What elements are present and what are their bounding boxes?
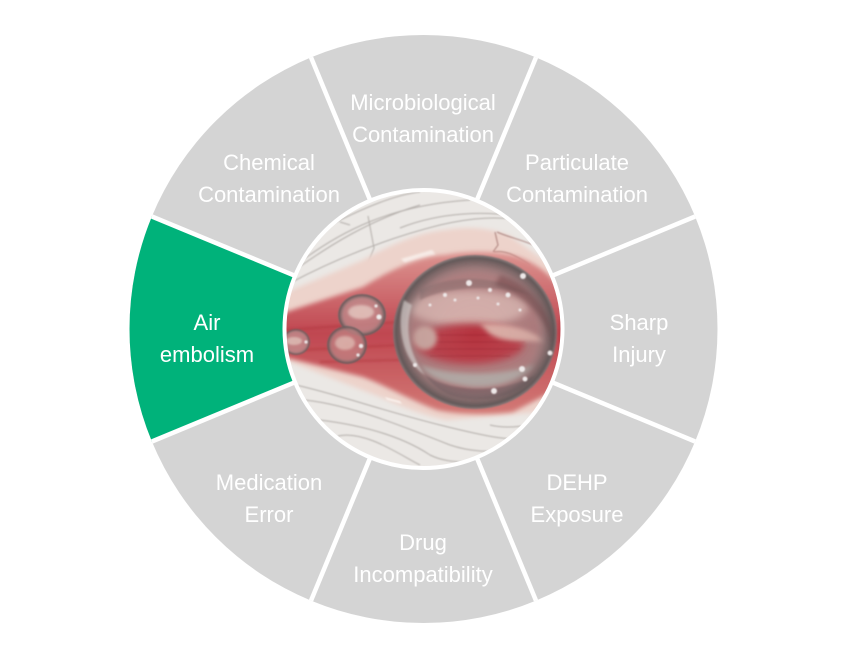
label: Drug Incompatibility: Drug <box>399 530 447 555</box>
label: Microbiological Contamination: Contamination <box>352 122 494 147</box>
highlights on vessel wall <box>401 250 436 263</box>
pale right highlight <box>480 324 545 342</box>
tissue contour lines <box>295 192 521 466</box>
central illustration: air bubbles in blood vessel <box>286 192 560 466</box>
rim light left <box>401 300 425 375</box>
panel: wheel segments <box>130 35 718 623</box>
label: Particulate Contamination: Contamination <box>506 182 648 207</box>
inner glints <box>413 273 552 394</box>
large air bubble <box>393 255 557 409</box>
small bubble 3 <box>282 329 310 355</box>
lower grey band <box>420 365 535 387</box>
tissue background <box>290 192 540 466</box>
central red streaks <box>416 324 524 364</box>
stream streaks <box>286 320 560 364</box>
upper pale band <box>408 290 528 326</box>
bubble interior <box>395 256 555 408</box>
label: Sharp Injury: Injury <box>612 342 666 367</box>
small bubble 1 <box>338 294 386 336</box>
label: DEHP Exposure: Exposure <box>531 502 623 527</box>
label: Particulate Contamination: Particulate <box>525 150 629 175</box>
red blood stream <box>280 252 565 414</box>
left pale patch <box>413 326 437 350</box>
rim dark upper right <box>495 274 552 336</box>
label: Drug Incompatibility: Incompatibility <box>353 562 493 587</box>
label: Microbiological Contamination: Microbiological <box>350 90 496 115</box>
small bubble 2 <box>327 326 367 364</box>
dark vessel cracks <box>492 231 532 262</box>
upper mottled band <box>420 279 530 300</box>
lower dark band <box>425 375 535 399</box>
segment base: grey sectors <box>130 35 718 623</box>
bubble rim <box>393 255 557 409</box>
label: Air embolism: embolism <box>160 342 254 367</box>
label: Sharp Injury: Sharp <box>610 310 668 335</box>
label: Chemical Contamination: Contamination <box>198 182 340 207</box>
label: Medication Error: Medication <box>216 470 322 495</box>
label: Chemical Contamination: Chemical <box>223 150 315 175</box>
label: Medication Error: Error <box>245 502 293 527</box>
segment: Air embolism highlighted <box>130 216 424 442</box>
infographic: circular risk wheel <box>130 35 718 623</box>
label: DEHP Exposure: DEHP <box>546 470 608 495</box>
label: Air embolism: Air <box>194 310 220 335</box>
pink vessel wall <box>280 228 565 420</box>
central circle white ring <box>284 190 562 468</box>
